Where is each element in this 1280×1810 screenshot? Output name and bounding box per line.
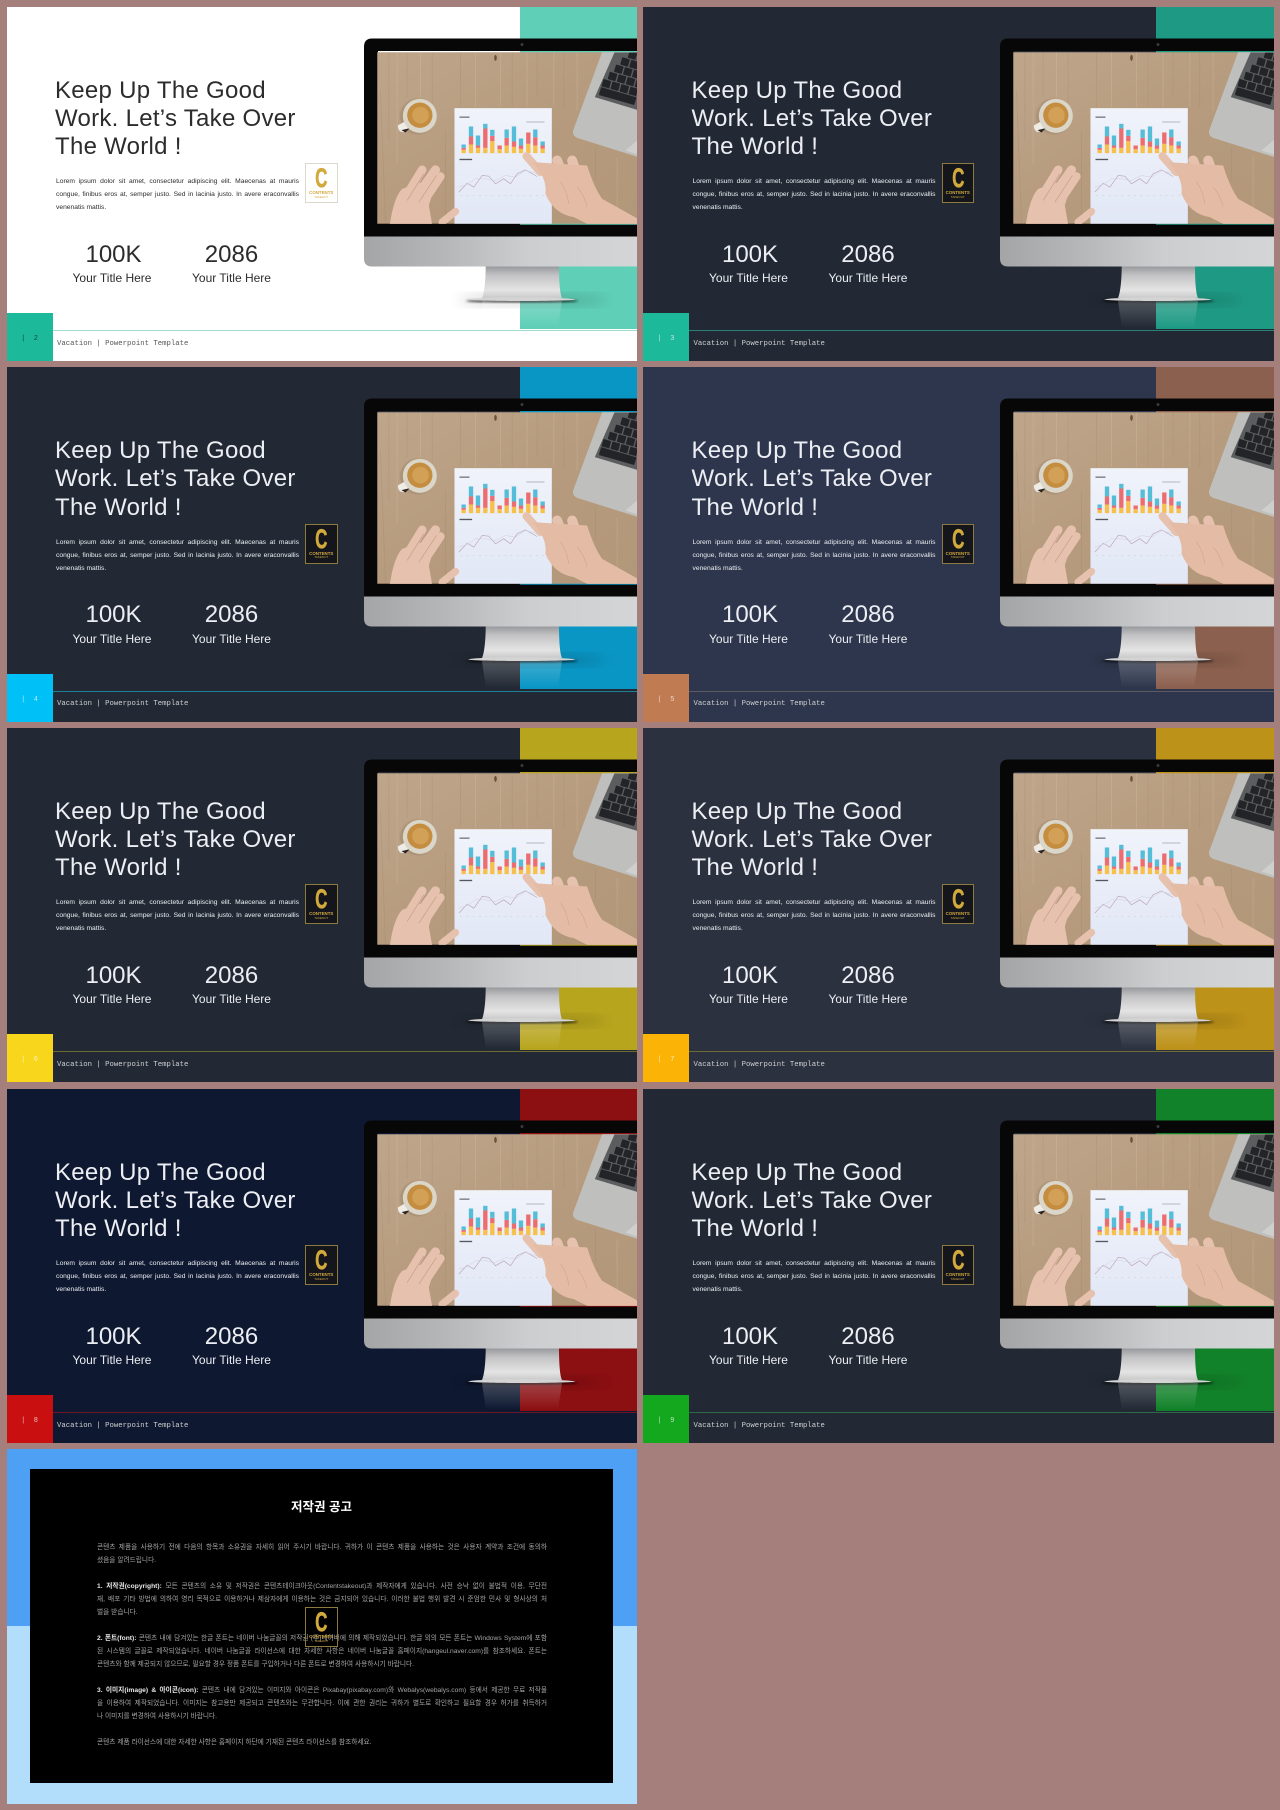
monitor with photo — [364, 398, 637, 684]
stat label 2: Your Title Here — [192, 992, 271, 1006]
logo: C — [952, 163, 964, 193]
panel: slide page 2 (white / mint) — [6, 6, 637, 361]
heading: Work. Let’s Take Over — [692, 465, 932, 492]
page number square: | 4 — [21, 696, 38, 704]
body text: venenatis mattis. — [56, 925, 106, 932]
logo: TAKEOUT — [951, 194, 965, 198]
footer line — [52, 1412, 638, 1413]
logo: C — [952, 524, 964, 554]
heading: Work. Let’s Take Over — [55, 1187, 296, 1214]
heading: Keep Up The Good — [55, 1158, 266, 1186]
footer text: Vacation | Powerpoint Template — [57, 1422, 188, 1430]
body text: Lorem ipsum dolor sit amet, consectetur adipiscing elit. Maecenas at mauris — [692, 1260, 936, 1267]
logo: TAKEOUT — [314, 555, 328, 559]
accent block — [1156, 1088, 1274, 1410]
body text: Lorem ipsum dolor sit amet, consectetur adipiscing elit. Maecenas at mauris — [56, 1260, 299, 1267]
logo: TAKEOUT — [314, 916, 328, 920]
intro paragraph: 셨음을 알려드립니다. — [97, 1556, 156, 1564]
black notice card — [30, 1469, 613, 1783]
footer line — [689, 330, 1274, 331]
paragraph: copyright: 벌을 받습니다. — [97, 1608, 138, 1616]
heading — [692, 798, 932, 881]
paragraph: image and icon: 3. 이미지(image) & 아이콘(icon): 콘텐츠 내에 담겨있는 이미지와 아이콘은 Pixabay(pixabay.com)와 Webalys(webalys.com) 등에서 제공한 무료 저작물 — [97, 1686, 547, 1694]
body text: Lorem ipsum dolor sit amet, consectetur adipiscing elit. Maecenas at mauris — [56, 899, 299, 906]
logo: CONTENTS — [309, 1634, 333, 1639]
notice title: 저작권 공고 — [291, 1500, 352, 1514]
logo: CONTENTS — [946, 1272, 970, 1277]
monitor with photo — [364, 38, 637, 322]
heading: Keep Up The Good — [692, 437, 902, 464]
page number square — [643, 313, 689, 361]
accent block — [520, 1088, 638, 1410]
body text: congue, finibus eros at, semper justo. Sed in lacinia justo. In avere eraconvallis — [692, 552, 936, 558]
paragraph: font: 된 시스템의 글꼴로 제작되었습니다. 네이버 나눔글꼴 라이선스에 대한 자세한 사항은 네이버 나눔글꼴 홈페이지(hangeul.naver.com)를 참조하세요. 폰트는 — [97, 1648, 547, 1654]
paragraph: font: 2. 폰트(font): 콘텐츠 내에 담겨있는 한글 폰트는 네이버 나눔글꼴의 저작권 (주)네이버에 의해 제작되었습니다. 한글 외의 모든 폰트는 Windows System에 포함 — [97, 1634, 547, 1642]
logo: CONTENTS — [946, 911, 970, 916]
logo: C — [952, 884, 964, 914]
footer text: Vacation | Powerpoint Template — [694, 1422, 825, 1430]
intro paragraph — [97, 1543, 547, 1564]
body text — [56, 1260, 299, 1293]
heading — [55, 798, 296, 881]
page number square: | 6 — [21, 1056, 38, 1064]
logo — [942, 1245, 974, 1285]
logo: C — [315, 1245, 327, 1275]
heading — [55, 1158, 296, 1242]
footer line — [689, 1412, 1274, 1413]
footer text: Vacation | Powerpoint Template — [57, 340, 188, 348]
stat: 100K: 100K — [722, 962, 778, 989]
panel: slide page 3 (dark / teal) — [643, 6, 1274, 361]
logo: TAKEOUT — [951, 1276, 965, 1280]
heading — [692, 1158, 932, 1242]
intro paragraph: 콘텐츠 제품을 사용하기 전에 다음의 항목과 소유권을 자세히 읽어 주시기 바랍니다. 귀하가 이 콘텐츠 제품을 사용하는 것은 사용자 계약과 조건에 동의하 — [97, 1544, 547, 1550]
heading: Work. Let’s Take Over — [692, 826, 932, 853]
heading: The World ! — [55, 1215, 182, 1242]
body text: Lorem ipsum dolor sit amet, consectetur adipiscing elit. Maecenas at mauris — [56, 538, 299, 546]
footer line — [52, 1051, 638, 1052]
heading: Work. Let’s Take Over — [55, 465, 296, 492]
heading: Keep Up The Good — [55, 76, 266, 104]
body text — [692, 1260, 936, 1293]
logo — [305, 1607, 338, 1647]
paragraph: image and icon: 을 이용하여 제작되었습니다. 이미지는 참고용만 제공되고 콘텐츠와는 무관합니다. 이에 관한 권리는 귀하가 별도로 확인하고 필요할 경우 허가를 취득하거 — [97, 1700, 547, 1706]
body text: Lorem ipsum dolor sit amet, consectetur adipiscing elit. Maecenas at mauris — [692, 178, 936, 185]
stat label 2: Your Title Here — [192, 271, 271, 285]
logo: C — [315, 524, 327, 554]
closing note: 콘텐츠 제품 라이선스에 대한 자세한 사항은 홈페이지 하단에 기재된 콘텐츠 라이선스를 참조하세요. — [97, 1738, 372, 1746]
stat: 2086: 2086 — [841, 240, 895, 268]
heading: Work. Let’s Take Over — [692, 105, 932, 132]
heading: Keep Up The Good — [692, 76, 902, 104]
accent block — [520, 728, 638, 1050]
monitor with photo — [1000, 1120, 1274, 1406]
body text: Lorem ipsum dolor sit amet, consectetur adipiscing elit. Maecenas at mauris — [692, 899, 936, 906]
paragraph: font — [97, 1634, 547, 1668]
body text: congue, finibus eros at, semper justo. Sed in lacinia justo. In avere eraconvallis — [692, 912, 936, 919]
logo: CONTENTS — [309, 190, 333, 195]
body text — [692, 899, 936, 932]
heading: Keep Up The Good — [692, 1158, 902, 1186]
accent block — [1156, 6, 1274, 328]
body text: congue, finibus eros at, semper justo. Sed in lacinia justo. In avere eraconvallis — [56, 552, 299, 558]
footer text: Vacation | Powerpoint Template — [57, 700, 188, 708]
footer text: Vacation | Powerpoint Template — [694, 700, 825, 708]
logo — [942, 524, 974, 564]
footer text: Vacation | Powerpoint Template — [694, 1061, 825, 1069]
paragraph: copyright — [97, 1582, 547, 1616]
body text: congue, finibus eros at, semper justo. Sed in lacinia justo. In avere eraconvallis — [692, 191, 936, 198]
stat: 2086: 2086 — [841, 962, 895, 989]
body text: venenatis mattis. — [692, 1286, 743, 1293]
logo — [942, 884, 974, 924]
heading: Keep Up The Good — [55, 798, 266, 825]
monitor with photo — [1000, 760, 1274, 1044]
logo: C — [952, 1245, 964, 1275]
body text — [692, 178, 936, 211]
monitor with photo — [364, 760, 637, 1044]
heading — [55, 437, 296, 521]
heading: The World ! — [692, 133, 818, 160]
panel: slide page 8 (midnight / red) — [6, 1088, 637, 1443]
stat: 2086: 2086 — [205, 240, 258, 268]
heading: The World ! — [55, 133, 182, 160]
logo: CONTENTS — [309, 911, 333, 916]
body text: congue, finibus eros at, semper justo. Sed in lacinia justo. In avere eraconvallis — [56, 1273, 299, 1280]
footer line — [689, 1051, 1274, 1052]
body text: Lorem ipsum dolor sit amet, consectetur adipiscing elit. Maecenas at mauris — [692, 538, 936, 546]
panel: slide page 9 (dark / green) — [643, 1088, 1274, 1443]
footer text: Vacation | Powerpoint Template — [694, 340, 825, 348]
page number square — [643, 1395, 689, 1443]
heading: Work. Let’s Take Over — [55, 826, 296, 853]
page number square: | 7 — [658, 1056, 674, 1064]
heading — [55, 76, 296, 160]
panel: slide page 6 (dark / olive yellow) — [6, 728, 637, 1082]
stat: 2086: 2086 — [205, 962, 258, 989]
paragraph: image and icon: 나 이미지를 변경하여 사용하시기 바랍니다. — [97, 1712, 217, 1720]
stat: 2086: 2086 — [205, 1322, 258, 1350]
footer line — [689, 690, 1274, 692]
logo: TAKEOUT — [314, 1638, 328, 1642]
stat label 2: Your Title Here — [829, 992, 907, 1006]
logo: TAKEOUT — [314, 1276, 328, 1280]
body text — [56, 538, 299, 572]
body text: congue, finibus eros at, semper justo. Sed in lacinia justo. In avere eraconvallis — [692, 1273, 936, 1280]
stat: 100K: 100K — [722, 601, 778, 628]
stat: 100K: 100K — [722, 240, 778, 268]
stat label 2: Your Title Here — [192, 1353, 271, 1367]
page number square: | 3 — [658, 335, 674, 343]
paragraph: image and icon — [97, 1686, 547, 1720]
stat label 1: Your Title Here — [709, 992, 788, 1006]
paragraph: copyright: 1. 저작권(copyright): 모든 콘텐츠의 소유 및 저작권은 콘텐츠테이크아웃(Contentstakeout)과 제작자에게 있습니다. 사전 승낙 없이 불법적 이용, 무단전 — [97, 1582, 547, 1590]
stat label 2: Your Title Here — [192, 632, 271, 646]
monitor with photo — [1000, 38, 1274, 324]
stat: 100K: 100K — [85, 1322, 142, 1350]
logo: TAKEOUT — [314, 194, 328, 198]
stat: 2086: 2086 — [841, 601, 895, 628]
logo: C — [315, 884, 327, 914]
monitor with photo — [364, 1120, 637, 1406]
panel: copyright notice slide — [6, 1449, 637, 1804]
body text: venenatis mattis. — [56, 1286, 106, 1293]
stat label 1: Your Title Here — [709, 1353, 788, 1367]
body text — [56, 899, 299, 932]
body text: venenatis mattis. — [692, 564, 743, 572]
logo: CONTENTS — [946, 550, 970, 556]
paragraph: font: 콘텐츠와 함께 제공되지 않으므로, 필요할 경우 정품 폰트를 구입하거나 다른 폰트로 변경하여 사용하시기 바랍니다. — [97, 1660, 414, 1668]
body text: congue, finibus eros at, semper justo. Sed in lacinia justo. In avere eraconvallis — [56, 912, 299, 919]
logo: TAKEOUT — [951, 916, 965, 920]
logo: CONTENTS — [946, 190, 970, 195]
logo — [942, 163, 974, 203]
page number square: | 9 — [658, 1417, 674, 1425]
logo: CONTENTS — [309, 550, 333, 556]
paragraph: copyright: 재, 배포 기타 방법에 의하여 영리 목적으로 이용하거나 제삼자에게 이용하는 것은 금지되어 있습니다. 이러한 불법 행위 발견 시 준엄한 민사 및 형사상의 처 — [97, 1596, 547, 1602]
stat label 1: Your Title Here — [73, 992, 151, 1006]
heading: The World ! — [692, 854, 818, 881]
page number square — [643, 674, 689, 722]
logo — [305, 163, 338, 203]
page number square — [6, 1034, 52, 1082]
stat label 2: Your Title Here — [829, 632, 907, 646]
page number square: | 8 — [21, 1417, 38, 1425]
monitor with photo — [1000, 398, 1274, 683]
page number square — [643, 1034, 689, 1082]
logo: C — [315, 1607, 327, 1637]
body text: venenatis mattis. — [692, 925, 743, 932]
stat label 1: Your Title Here — [73, 632, 151, 646]
body text: venenatis mattis. — [56, 204, 106, 211]
stat: 2086: 2086 — [205, 601, 258, 628]
accent block — [520, 367, 638, 689]
body text: Lorem ipsum dolor sit amet, consectetur adipiscing elit. Maecenas at mauris — [56, 178, 299, 185]
stat label 1: Your Title Here — [709, 632, 788, 646]
stat: 100K: 100K — [85, 962, 142, 989]
stat: 100K: 100K — [85, 240, 142, 268]
panel: slide page 4 (dark / blue) — [6, 367, 637, 722]
logo: TAKEOUT — [951, 555, 965, 559]
body text: congue, finibus eros at, semper justo. Sed in lacinia justo. In avere eraconvallis — [56, 191, 299, 198]
logo — [305, 524, 338, 564]
stat label 1: Your Title Here — [73, 271, 151, 285]
page number square — [6, 313, 52, 361]
heading: The World ! — [55, 854, 182, 881]
page number square — [6, 1395, 52, 1443]
heading: Keep Up The Good — [55, 437, 266, 464]
panel: slide page 5 (navy / brown) — [643, 367, 1274, 722]
heading: The World ! — [692, 494, 818, 521]
accent block — [520, 6, 638, 328]
body text: venenatis mattis. — [56, 564, 106, 572]
body text: venenatis mattis. — [692, 204, 743, 211]
heading: The World ! — [692, 1215, 818, 1242]
heading: Keep Up The Good — [692, 798, 902, 825]
stat label 2: Your Title Here — [829, 271, 907, 285]
stat label 2: Your Title Here — [829, 1353, 907, 1367]
accent block — [1156, 367, 1274, 689]
logo — [305, 884, 338, 924]
heading — [692, 437, 932, 521]
heading: The World ! — [55, 494, 182, 521]
heading: Work. Let’s Take Over — [55, 105, 296, 132]
page number square: | 2 — [21, 335, 38, 343]
body text — [692, 538, 936, 572]
stat label 1: Your Title Here — [709, 271, 788, 285]
page number square — [6, 674, 52, 722]
panel: slide page 7 (slate / amber) — [643, 728, 1274, 1082]
stat: 100K: 100K — [85, 601, 142, 628]
logo: C — [315, 163, 327, 193]
stat: 2086: 2086 — [841, 1322, 895, 1350]
footer line — [52, 690, 638, 692]
stat label 1: Your Title Here — [73, 1353, 151, 1367]
stat: 100K: 100K — [722, 1322, 778, 1350]
logo — [305, 1245, 338, 1285]
accent block — [1156, 728, 1274, 1050]
footer text: Vacation | Powerpoint Template — [57, 1061, 188, 1069]
footer line — [52, 330, 638, 331]
body text — [56, 178, 299, 211]
heading — [692, 76, 932, 160]
page number square: | 5 — [658, 696, 674, 704]
heading: Work. Let’s Take Over — [692, 1187, 932, 1214]
logo: CONTENTS — [309, 1272, 333, 1277]
